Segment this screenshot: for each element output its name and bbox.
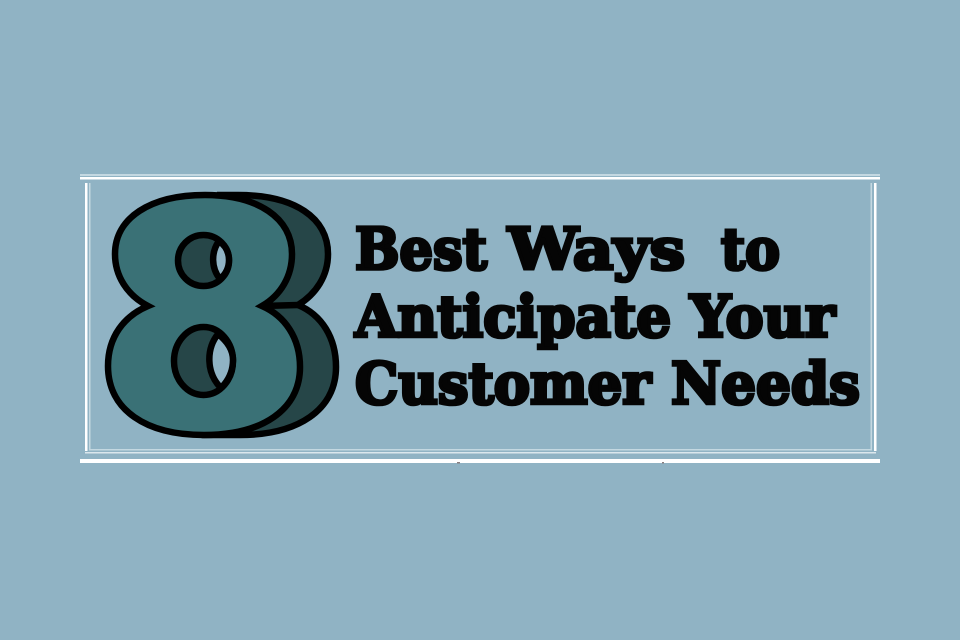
lower counter of the 8 (174, 327, 233, 395)
title line 2 (354, 284, 836, 350)
title line 2: Anticipate (354, 284, 671, 350)
number 8 extruded back face (205, 195, 336, 435)
decorative frame (80, 174, 880, 464)
number 8 front face (108, 195, 300, 435)
icon: large 3D number 8 (108, 195, 336, 435)
title line 3 (355, 350, 860, 418)
title line 1: to (721, 216, 780, 283)
upper counter of the 8 (178, 235, 229, 286)
title line 1 (355, 216, 780, 283)
title line 1: Best (355, 216, 488, 283)
title line 3: Customer (355, 350, 652, 418)
title: Best Ways to Anticipate Your Customer Needs (354, 216, 860, 418)
title line 2: Your (689, 284, 836, 350)
lower see-through lens (209, 334, 233, 388)
upper see-through lens (213, 241, 229, 279)
title line 1: Ways (507, 216, 685, 283)
title line 3: Needs (671, 350, 860, 418)
waist edge of back face (262, 305, 298, 306)
